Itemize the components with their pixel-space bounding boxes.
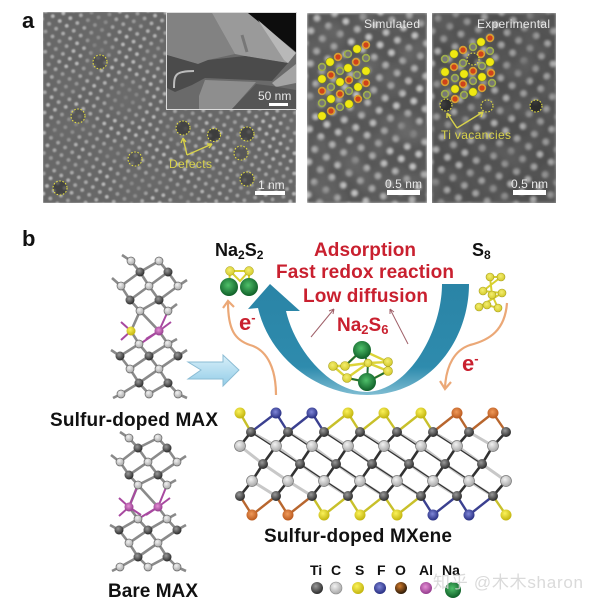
Ti atoms [235,427,511,501]
heading: mechanism text: Low diffusion [303,286,428,307]
label: Na2S6: S [369,315,381,336]
label: e- left: - [251,310,256,325]
panel label b: b [22,226,35,251]
scale bar 0.5 nm simulated: 0.5 nm [385,177,422,191]
legend labels: O [395,562,406,578]
label: bare MAX: Bare MAX [108,581,198,602]
legend labels: Al [419,562,433,578]
molecule: Na2S6 [328,341,392,391]
label simulated: Simulated [364,17,420,31]
defect circles [53,55,254,195]
label: Na2S6: Na [337,315,361,336]
atom overlay simulated [318,42,370,120]
heading: mechanism text [276,240,454,307]
scale bar 50 nm: 50 nm [258,89,291,103]
scale bar 0.5 nm experimental: 0.5 nm [511,177,548,191]
label: Na2S6: 2 [361,322,369,337]
defects label with arrows [169,138,212,171]
curved arrow: polysulfide conversion bowl [248,284,469,395]
heading: mechanism text: Adsorption [314,240,416,261]
C atoms [234,440,512,486]
legend labels: Na [442,562,460,578]
C-Ti lattice bonds [240,432,506,496]
label: S8: 8 [484,248,491,262]
heading: mechanism text: Fast redox reaction [276,262,454,283]
atom overlay experimental [441,35,495,102]
vacancy circles [440,53,542,112]
legend labels: S [355,562,364,578]
Ti vacancies label with arrows: Ti vacancies [441,128,511,142]
F atoms [270,408,474,520]
legend balls [311,582,461,598]
legend labels: F [377,562,386,578]
panel: simulated lattice image [307,13,427,203]
S atoms [234,408,512,520]
defects label with arrows: Defects [169,157,212,171]
Ti vacancies label with arrows [441,112,511,142]
label: e- right: e [462,351,474,376]
label: Na2S6: 6 [381,322,388,337]
O atoms [246,408,498,520]
watermark: 知乎 @木木sharon [433,573,583,592]
surface bonds [240,413,506,515]
legend labels: C [331,562,341,578]
molecule: S8 [475,273,506,312]
panel: experimental lattice image [432,13,556,203]
label: e- left: e [239,310,251,335]
label: e- right: - [474,351,479,366]
label: Na2S2: S [245,240,257,260]
label: sulfur-doped MAX: Sulfur-doped MAX [50,410,218,431]
legend: atom key [310,562,461,598]
scale bar 1 nm: 1 nm [258,178,285,192]
arrow: electron transfer right [440,303,507,389]
label: Na2S2: 2 [238,248,245,262]
arrow: electron transfer left [223,301,276,395]
molecule: Na2S2 [220,266,258,296]
panel label a: a [22,8,35,33]
molecule: bare MAX [110,432,186,571]
label: sulfur-doped MXene: Sulfur-doped MXene [264,526,452,547]
molecule: sulfur-doped MXene [234,408,512,520]
label experimental: Experimental [477,17,550,31]
legend labels: Ti [310,562,322,578]
legend labels [310,562,460,578]
label: S8: S [472,240,484,260]
label: Na2S2: Na [215,240,238,260]
label: Na2S2: 2 [257,248,264,262]
molecule: sulfur-doped MAX [111,255,187,398]
inset: SEM image of nanosheets [166,12,297,110]
panel: main HRTEM micrograph with defects [43,12,296,203]
small arrows to text [311,309,408,344]
arrow: MAX to MXene [188,355,239,386]
